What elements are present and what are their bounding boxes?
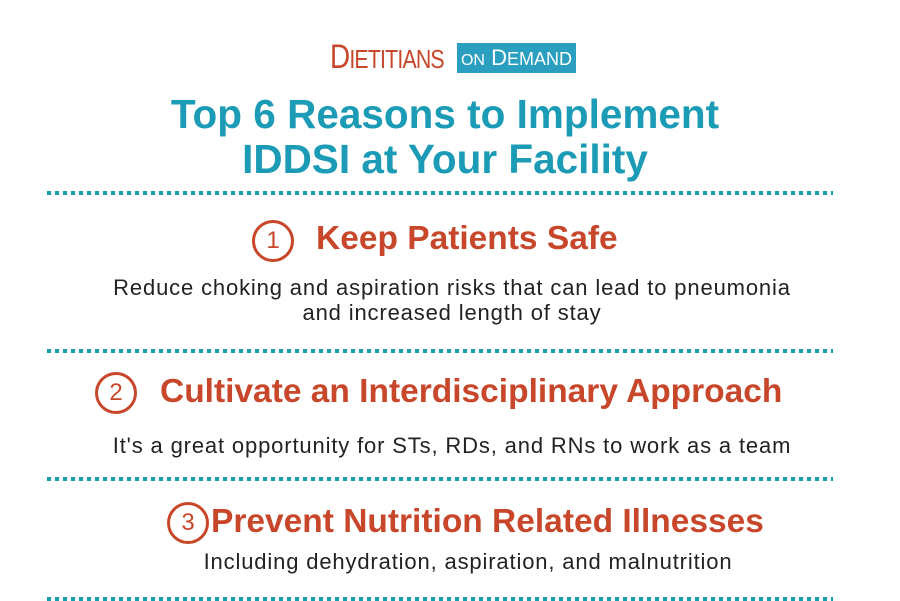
reason 2 (95, 372, 791, 458)
logo (330, 38, 576, 76)
icon: number 1 (252, 220, 294, 262)
heading 1: Keep Patients Safe (316, 220, 618, 257)
icon: number 2: 2 (109, 379, 123, 406)
logo text: dietitians: DIETITIANS (330, 38, 444, 76)
reason 3 (167, 502, 764, 574)
logo box: on demand: ON DEMAND (461, 45, 572, 70)
title: Top 6 Reasons to Implement (171, 91, 719, 137)
body 3: Including dehydration, aspiration, and malnutrition (204, 549, 732, 574)
body 2: It's a great opportunity for STs, RDs, and RNs to work as a team (113, 433, 791, 458)
heading 2: Cultivate an Interdisciplinary Approach (160, 373, 782, 410)
icon: number 2 (95, 372, 137, 414)
reason 1 (113, 220, 791, 325)
body 1 (113, 275, 791, 325)
title: IDDSI at Your Facility (242, 136, 648, 182)
title (171, 91, 719, 182)
body 1: Reduce choking and aspiration risks that can lead to pneumonia (113, 275, 791, 300)
body 1: and increased length of stay (302, 300, 601, 325)
icon: number 3 (167, 502, 209, 544)
icon: number 1: 1 (266, 227, 280, 254)
icon: number 3: 3 (181, 509, 195, 536)
heading 3: Prevent Nutrition Related Illnesses (211, 503, 764, 540)
